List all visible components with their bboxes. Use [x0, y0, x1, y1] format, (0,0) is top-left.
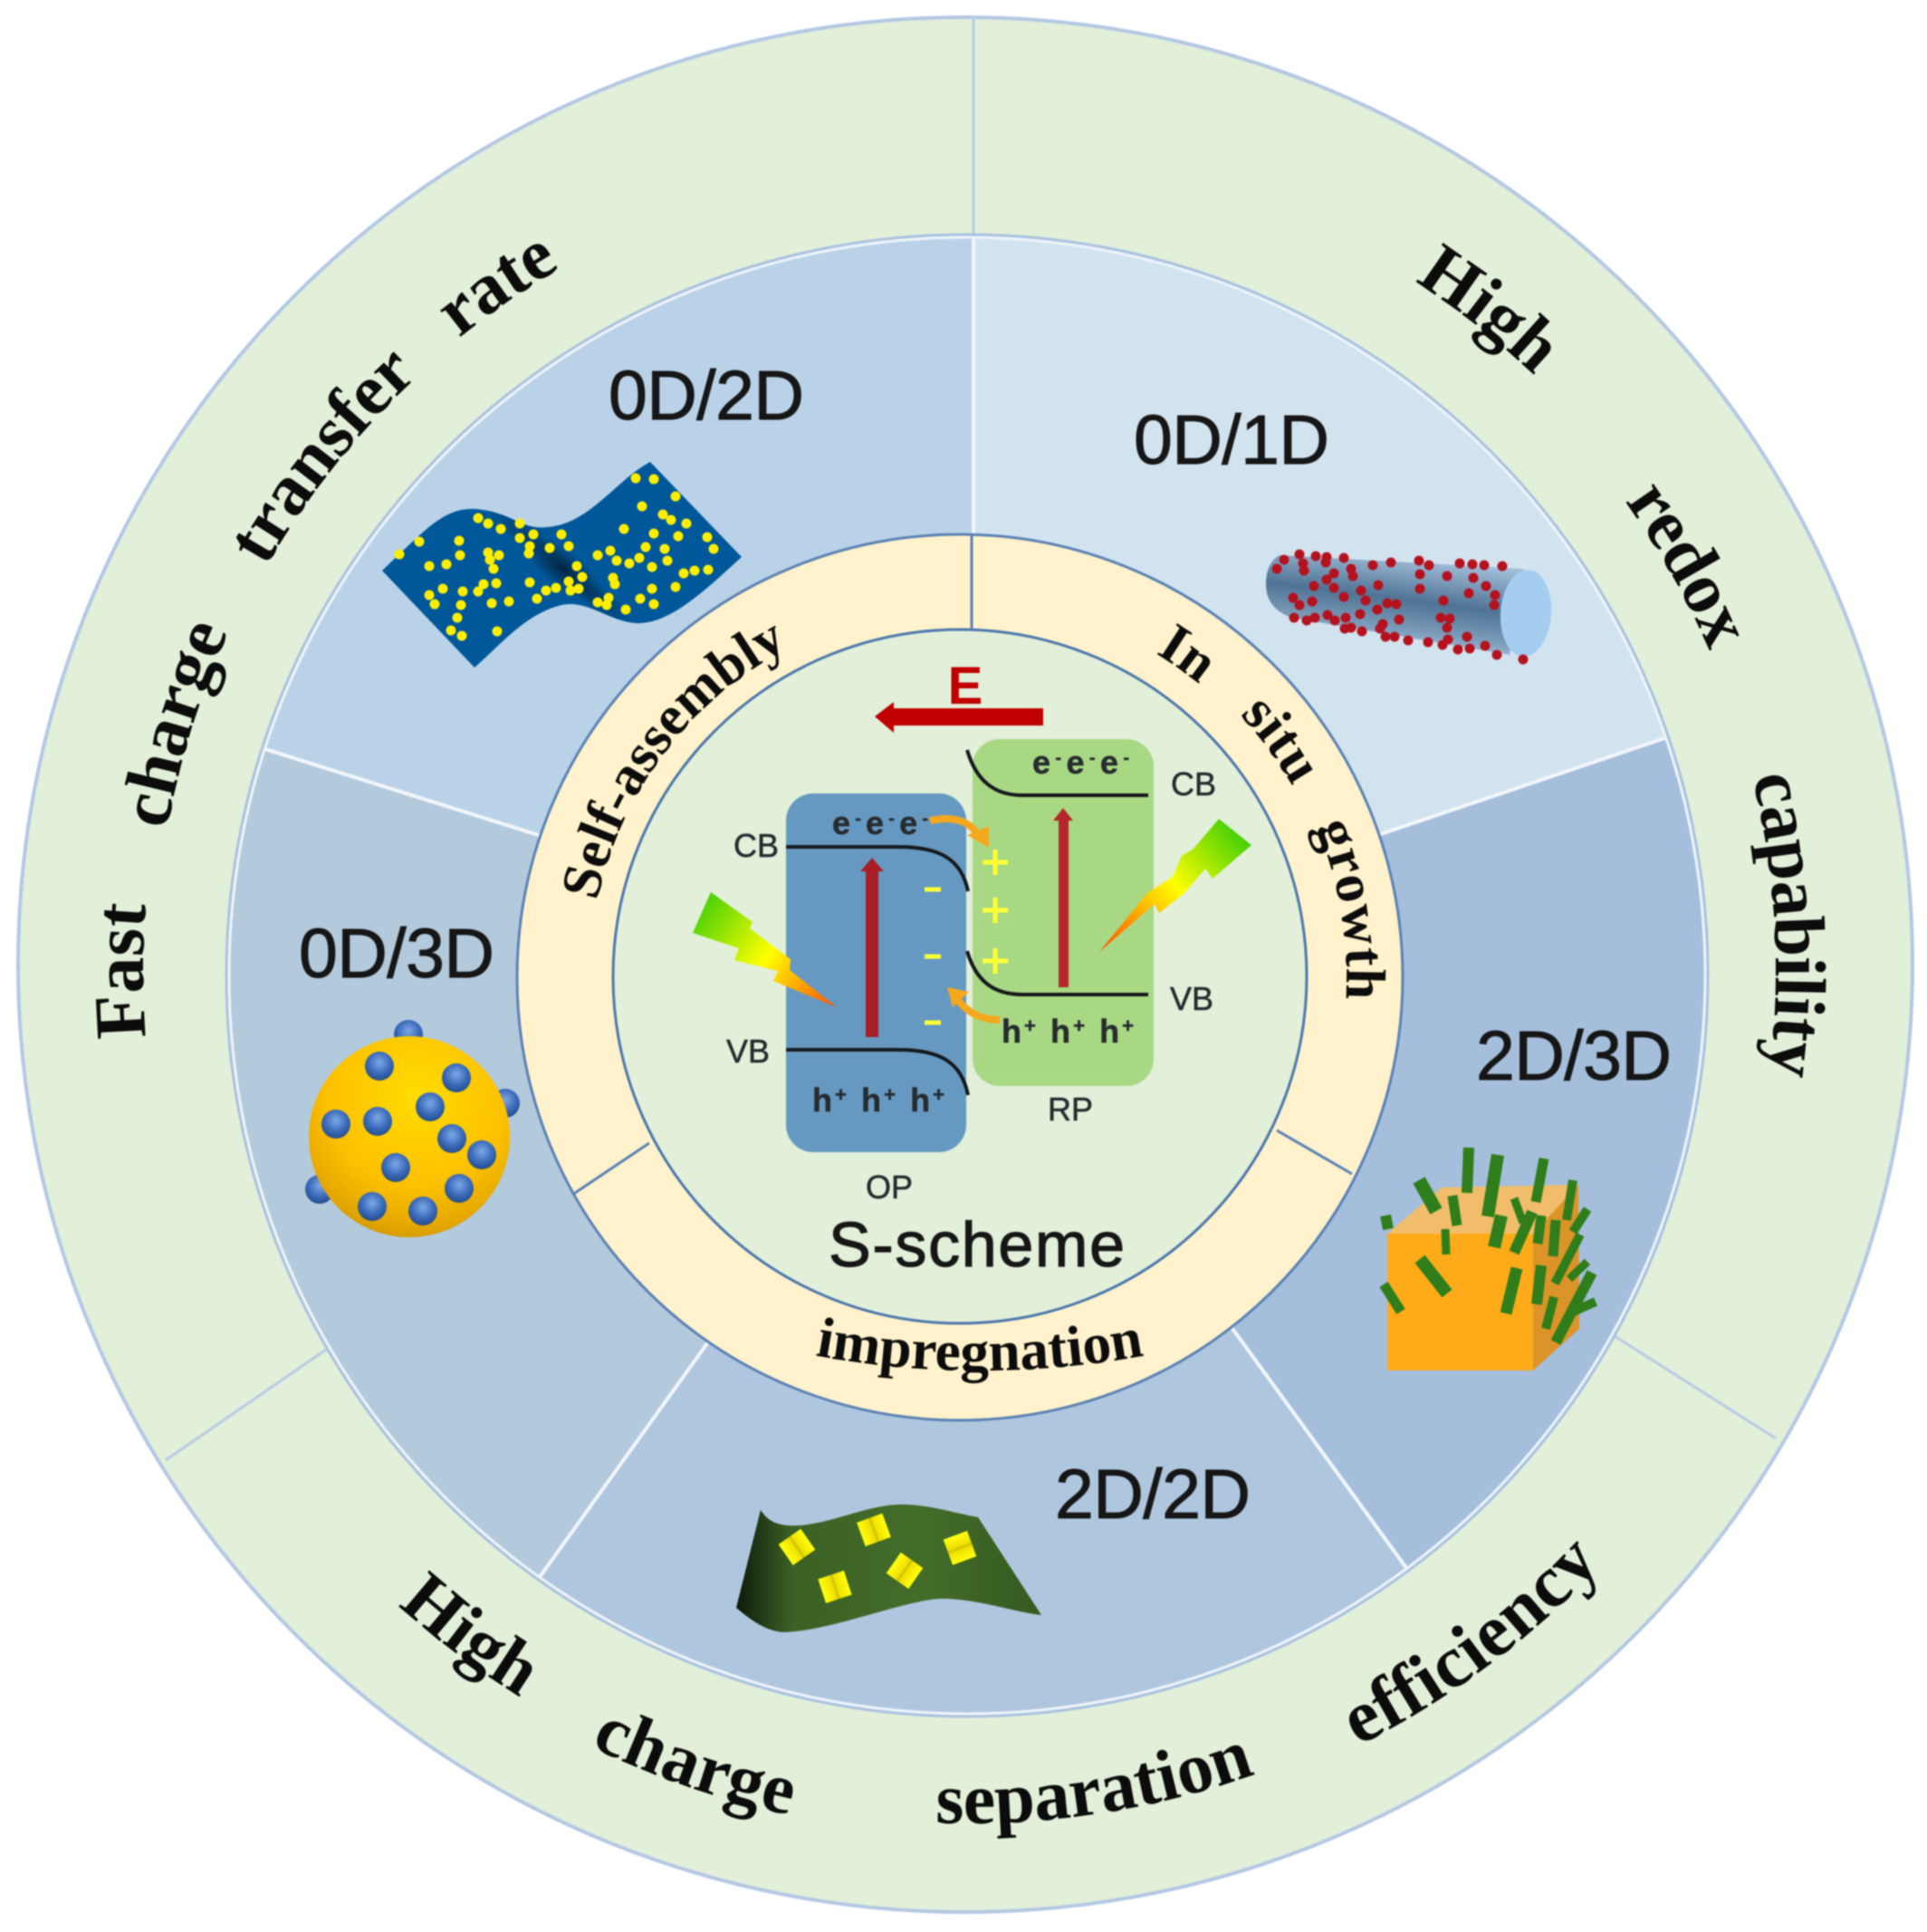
panel: synthesis methods ring [517, 534, 1403, 1420]
panel: OP band box: e [832, 804, 850, 841]
outer text: fast charge transfer rate: Fast [94, 902, 147, 1040]
outer text: high redox capability [1414, 242, 1827, 1079]
panel: RP band box: h [1039, 1013, 1070, 1050]
icon: gold sphere with blue balls [305, 1020, 520, 1237]
ring text: in situ growth: In [1156, 622, 1212, 685]
outer text: high charge separation efficiency: efficiency [1347, 1540, 1596, 1741]
panel: OP band box: - [888, 809, 895, 829]
ring text: self-assembly: Self-assembly [563, 625, 780, 899]
panel: OP band box: e [899, 804, 917, 841]
label: 2D/2D: 2D/2D [1055, 1456, 1251, 1533]
icon: lightning bolt right [1099, 819, 1251, 952]
panel: RP band box: - [1089, 748, 1096, 768]
ring text: in situ growth [1156, 622, 1387, 1000]
outer text: high charge separation efficiency: High [398, 1570, 532, 1697]
label: 0D/2D: 0D/2D [609, 357, 804, 435]
ring text: in situ growth: growth [1307, 821, 1387, 1000]
label: 0D/1D: 0D/1D [1134, 401, 1329, 479]
arrow: electric field E: E [948, 657, 983, 716]
outer text: high charge separation efficiency [398, 1540, 1596, 1840]
panel: OP band box: h [812, 1081, 832, 1119]
icon: orange cube with green rods [1384, 1148, 1596, 1370]
arrow: electric field E [875, 657, 1043, 733]
panel: RP band box: + [1073, 1014, 1085, 1037]
label: 0D/3D: 0D/3D [299, 915, 494, 993]
panel: OP band box: - [922, 809, 928, 829]
outer text: high charge separation efficiency: charge [596, 1714, 793, 1821]
label: OP: OP [866, 1168, 913, 1206]
panel: OP band box: + [933, 1083, 944, 1106]
outer text: fast charge transfer rate: rate [439, 243, 558, 337]
icon: green ribbon with yellow flakes [736, 1504, 1041, 1632]
label: CB left: CB [733, 827, 779, 864]
panel: RP band box: h [1088, 1013, 1119, 1050]
panel: RP band box: h [1002, 1013, 1021, 1050]
outer text: high redox capability: capability [1750, 774, 1827, 1079]
panel: RP band box [967, 739, 1154, 1086]
ring text: impregnation: impregnation [815, 1317, 1145, 1384]
label: CB right: CB [1171, 765, 1216, 803]
outer text: fast charge transfer rate [94, 243, 558, 1040]
outer text: high charge separation efficiency: separation [936, 1745, 1255, 1840]
outer text: fast charge transfer rate: charge [123, 623, 227, 826]
label: 2D/3D: 2D/3D [1476, 1017, 1672, 1095]
panel: middle ring of dimensional sectors [225, 233, 1710, 1718]
title: S-scheme: S-scheme [829, 1209, 1125, 1280]
panel: RP band box: + [1122, 1014, 1134, 1037]
panel: OP band box: + [835, 1083, 847, 1106]
label: RP: RP [1048, 1091, 1093, 1128]
panel: OP band box: h [898, 1081, 930, 1119]
panel: OP band box [786, 793, 968, 1152]
panel: OP band box: h [849, 1081, 881, 1119]
icon: lightning bolt left [693, 892, 837, 1007]
panel: RP band box: - [1123, 748, 1129, 768]
panel: OP band box: e [866, 804, 884, 841]
panel: RP band box: e [1100, 744, 1118, 781]
outer text: fast charge transfer rate: transfer [235, 351, 412, 562]
panel: RP band box: + [1024, 1014, 1036, 1037]
panel: OP band box: + [884, 1083, 896, 1106]
arrow: electron transfer curve [930, 819, 989, 848]
outer text: high redox capability: redox [1625, 483, 1740, 652]
panel: OP band box: - [855, 809, 861, 829]
ring text: in situ growth: situ [1241, 701, 1313, 786]
icon: wavy blue sheet with yellow dots [382, 462, 742, 668]
panel: RP band box: - [1055, 748, 1061, 768]
arrow: hole transfer curve [947, 987, 1000, 1020]
panel: S-scheme centre disc [613, 630, 1307, 1323]
label: VB right: VB [1170, 980, 1213, 1017]
outer text: high redox capability: High [1414, 242, 1552, 375]
icon: cylinder with red dots [1266, 554, 1554, 659]
panel: RP band box: e [1066, 744, 1084, 781]
panel: RP band box: e [1032, 744, 1050, 781]
label: VB left: VB [726, 1033, 770, 1070]
